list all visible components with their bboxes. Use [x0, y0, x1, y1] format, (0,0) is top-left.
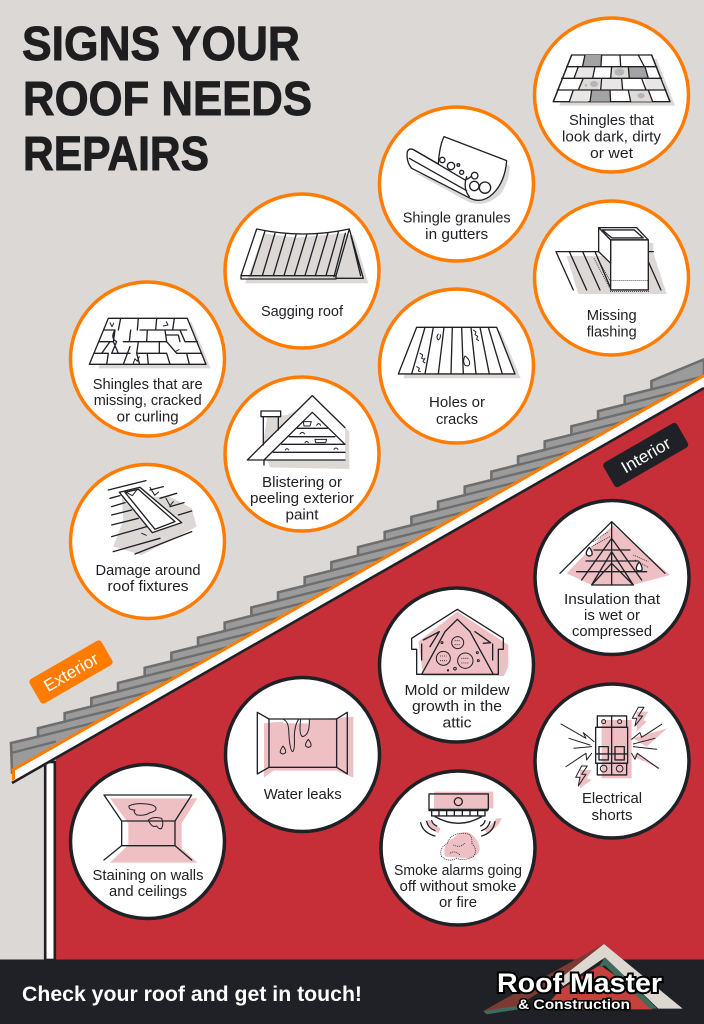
icon: house with peeling paint: [247, 396, 349, 469]
caption: Electrical: [582, 790, 642, 807]
panel: damage around roof fixtures: [70, 464, 224, 618]
icon: leaking room: [257, 712, 353, 778]
label: interior: Interior: [618, 434, 674, 477]
panel: holes or cracks: [380, 289, 534, 443]
caption: Water leaks: [264, 786, 342, 803]
caption: missing, cracked: [94, 392, 202, 409]
caption: Damage around: [96, 562, 200, 579]
caption: peeling exterior: [250, 490, 354, 507]
caption: in gutters: [425, 226, 488, 243]
panel: blistering or peeling paint: [225, 377, 379, 531]
panel: sagging roof: [225, 194, 379, 348]
caption: [96, 562, 200, 595]
caption: [93, 376, 203, 426]
caption: roof fixtures: [108, 578, 188, 595]
label: exterior: [28, 639, 114, 705]
panel: smoke alarms: [381, 771, 535, 925]
caption: Mold or mildew: [404, 682, 510, 699]
caption: [582, 790, 642, 824]
caption: growth in the: [412, 698, 502, 715]
panel: staining on walls and ceilings: [70, 764, 224, 918]
panel: electrical shorts: [535, 684, 689, 838]
caption: Smoke alarms going: [394, 862, 522, 879]
panel: missing flashing: [534, 201, 688, 355]
label: interior: [602, 422, 690, 488]
icon: attic insulation: [560, 522, 670, 585]
icon: skylight: [108, 481, 197, 555]
caption: Staining on walls: [92, 867, 204, 884]
title: SIGNS YOUR: [22, 17, 300, 71]
caption: [404, 682, 510, 732]
caption: is wet or: [584, 607, 640, 624]
caption: flashing: [587, 324, 637, 340]
panel: shingle granules in gutters: [380, 107, 534, 261]
title: ROOF NEEDS: [23, 72, 312, 126]
caption: [564, 591, 661, 640]
caption: Missing: [587, 307, 637, 324]
caption: Blistering or: [262, 474, 342, 491]
caption: Shingles that are: [93, 376, 203, 393]
caption: [250, 474, 354, 524]
panel: shingles missing, cracked or curling: [70, 282, 224, 436]
wall post: [45, 762, 55, 960]
caption: [403, 210, 511, 243]
icon: moldy attic: [412, 609, 508, 676]
caption: Shingles that: [569, 112, 655, 129]
roof fascia: [12, 375, 704, 783]
caption: [429, 394, 485, 428]
icon: cracked roof boards: [398, 327, 521, 378]
panel: insulation wet or compressed: [535, 500, 689, 654]
caption: cracks: [436, 411, 478, 428]
caption: paint: [286, 506, 319, 524]
caption: [562, 112, 661, 162]
red interior wall: [56, 388, 704, 960]
logo: Roof Master & Construction: Roof Master: [497, 968, 663, 998]
caption: or wet: [590, 145, 634, 162]
panel: mold or mildew: [380, 588, 534, 742]
caption: Sagging roof: [261, 303, 344, 320]
caption: look dark, dirty: [562, 128, 661, 146]
icon: gutter: [407, 137, 510, 204]
label: exterior: Exterior: [41, 649, 102, 696]
caption: or fire: [439, 894, 477, 911]
caption: [92, 867, 204, 900]
caption: Insulation that: [564, 591, 661, 608]
caption: [587, 307, 637, 340]
logo: Roof Master & Construction: & Construction: [518, 997, 630, 1012]
caption: [394, 862, 522, 911]
footer bar: [0, 960, 704, 1024]
caption: compressed: [572, 623, 652, 640]
icon: chimney without flashing: [556, 228, 667, 294]
caption: Shingle granules: [403, 210, 511, 226]
footer call to action: Check your roof and get in touch!: [22, 982, 362, 1006]
panel: water leaks: [226, 678, 380, 832]
logo: Roof Master & Construction: [483, 944, 683, 1014]
panel: shingles dark, dirty or wet: [534, 18, 688, 172]
caption: attic: [442, 714, 472, 732]
caption: or curling: [117, 408, 179, 426]
icon: breaker with sparks: [561, 707, 667, 788]
icon: damaged shingles: [89, 318, 211, 368]
title: [22, 17, 312, 181]
icon: sagging roof: [241, 229, 368, 283]
title: REPAIRS: [23, 127, 209, 181]
icon: stained room: [104, 795, 197, 863]
caption: off without smoke: [400, 878, 516, 895]
icon: stained shingles: [553, 55, 675, 106]
caption: shorts: [592, 807, 632, 824]
icon: smoke alarm: [421, 792, 502, 860]
caption: Holes or: [429, 394, 485, 411]
roof shingles: [11, 359, 704, 772]
caption: and ceilings: [109, 883, 187, 900]
